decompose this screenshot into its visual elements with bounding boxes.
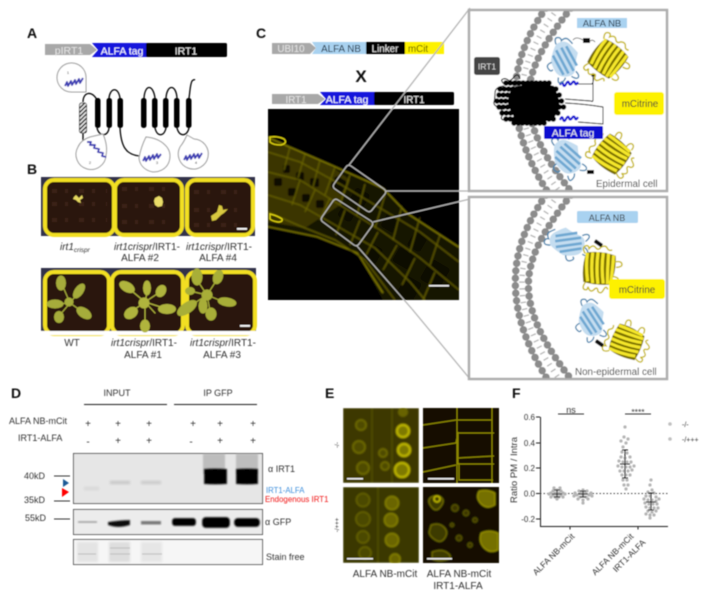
x category labels: ALFA NB-mCit (531, 531, 577, 577)
captions: irt1crispr/IRT1- (186, 242, 252, 253)
row label -/+++: -/+++ (335, 517, 341, 532)
panel: D western blots (9, 385, 328, 564)
blot annotations: Endogenous IRT1 (265, 495, 328, 504)
sample table (9, 416, 256, 448)
sample table: + (250, 436, 256, 447)
blot annotations: α IRT1 (268, 464, 295, 474)
image: NB-mCit IRT1-ALFA, -/- (423, 408, 499, 483)
photo row: bottom (41, 268, 257, 335)
image: NB-mCit, -/+++ (343, 487, 419, 564)
zoom bubble 2 (76, 134, 107, 169)
captions (60, 242, 256, 361)
rosette 3 (175, 269, 237, 320)
x category labels: IRT1-ALFA (611, 537, 648, 574)
legend (668, 422, 699, 444)
sample table: + (217, 436, 223, 447)
ALFA nanobody and mCitrine, upper (541, 217, 624, 295)
construct bar IRT1 ALFA tag IRT1 (272, 92, 454, 106)
construct bar UBI10 ALFA NB Linker mCit: UBI10 (277, 44, 305, 55)
molecular weight markers: 35kD (24, 495, 46, 505)
panel: epidermal cell structural model (469, 8, 667, 194)
construct bar IRT1 ALFA tag IRT1: IRT1 (403, 95, 425, 106)
legend: -/+++ (682, 437, 699, 444)
construct bar UBI10 ALFA NB Linker mCit: mCit (408, 44, 428, 55)
captions: crispr (74, 247, 91, 254)
panel label C: C (256, 25, 266, 41)
sample table: + (146, 419, 152, 430)
blot: alpha IRT1 (74, 454, 262, 504)
captions: ALFA #1 (124, 350, 162, 361)
panel: B plant photographs (27, 161, 257, 361)
root confocal micrograph (268, 109, 459, 303)
captions: ALFA #4 (199, 253, 237, 264)
y tick labels: 0.6 (524, 413, 536, 422)
captions: irt1crispr/IRT1- (111, 338, 177, 349)
callout zoom lines and boxes (321, 8, 470, 379)
panel: E confocal images (325, 385, 499, 592)
sample table: ALFA NB-mCit (9, 416, 68, 426)
zoom bubble 1 (57, 63, 86, 92)
panel: C constructs and root micrograph (256, 8, 470, 379)
IRT1 membrane topology diagram (57, 63, 208, 172)
captions: ALFA #3 (203, 350, 241, 361)
label mCitrine: mCitrine (622, 99, 659, 110)
significance: ****: **** (631, 407, 645, 417)
label IRT1 (474, 57, 500, 75)
column captions (353, 569, 491, 592)
IRT1 structure (494, 73, 603, 124)
photo row: top (41, 177, 255, 236)
column captions: IRT1-ALFA (433, 581, 483, 592)
panel label A: A (27, 25, 37, 41)
sample table: + (146, 436, 152, 447)
construct bar pIRT1 ALFA tag IRT1: IRT1 (175, 46, 197, 58)
legend: -/- (682, 422, 689, 429)
blot: alpha GFP (74, 510, 262, 534)
sample table: + (115, 436, 121, 447)
captions: irt1 (60, 242, 74, 253)
column captions: ALFA NB-mCit (427, 569, 491, 580)
label ALFA NB: ALFA NB (589, 213, 625, 223)
y tick labels: 0.2 (524, 464, 536, 473)
panel label D: D (11, 385, 21, 401)
sample table: + (115, 419, 121, 430)
panel: non-epidermal cell structural model (469, 195, 667, 382)
zoom bubble 2: 2 (89, 160, 92, 165)
significance: **** (625, 407, 651, 417)
sample table: IRT1-ALFA (18, 433, 62, 443)
construct bar UBI10 ALFA NB Linker mCit (272, 42, 444, 55)
captions: irt1crispr/IRT1- (114, 242, 180, 253)
zoom bubble 4 (178, 135, 208, 169)
x category labels: ALFA NB-mCit (590, 531, 636, 577)
ALFA nanobody and mCitrine, lower (575, 298, 656, 368)
ALFA nanobody and mCitrine, upper (545, 30, 639, 92)
label ALFA tag: ALFA tag (552, 128, 594, 140)
significance: ns (558, 405, 584, 415)
label ALFA NB: ALFA NB (583, 18, 621, 30)
label mCitrine: mCitrine (619, 285, 656, 296)
label mCitrine (609, 279, 665, 299)
ALFA nanobody and mCitrine, lower (548, 123, 645, 184)
sample table: + (250, 419, 256, 430)
construct bar pIRT1 ALFA tag IRT1: ALFA tag (101, 46, 143, 58)
molecular weight markers (24, 471, 70, 523)
construct bar pIRT1 ALFA tag IRT1 (45, 43, 227, 58)
sample table: - (86, 437, 90, 448)
label ALFA tag (544, 126, 603, 140)
zoom bubble 3 (139, 137, 170, 172)
blot annotations (265, 464, 328, 562)
membrane bilayer (515, 8, 573, 194)
group headers (84, 388, 257, 405)
blot annotations: α GFP (265, 517, 291, 527)
captions: ALFA #2 (121, 253, 159, 264)
panel label E: E (325, 385, 334, 401)
rosette 1 (118, 279, 176, 332)
panel label F: F (512, 385, 521, 401)
mean and SD error bars (552, 450, 656, 510)
construct bar IRT1 ALFA tag IRT1: ALFA tag (326, 94, 368, 106)
blot annotations: IRT1-ALFA (266, 486, 305, 495)
arrowhead: IRT1-ALFA (63, 479, 69, 487)
panel: F scatter plot (509, 385, 699, 577)
captions: WT (64, 338, 80, 349)
zoom bubble 4: 4 (195, 160, 198, 165)
caption Epidermal cell: Epidermal cell (596, 179, 658, 190)
molecular weight markers: 55kD (25, 513, 47, 523)
construct bar UBI10 ALFA NB Linker mCit: Linker (372, 44, 399, 55)
membrane bilayer (515, 195, 573, 382)
x category labels (531, 531, 648, 577)
sample table: + (190, 419, 196, 430)
WT rosette (47, 276, 93, 322)
row label -/-: -/- (335, 442, 341, 448)
label IRT1: IRT1 (478, 62, 496, 72)
sample table: + (217, 419, 223, 430)
scatter points (549, 427, 659, 518)
construct bar pIRT1 ALFA tag IRT1: pIRT1 (55, 45, 83, 57)
panel label B: B (27, 161, 37, 177)
group headers: IP GFP (203, 388, 233, 398)
molecular weight markers: 40kD (24, 471, 46, 481)
construct bar UBI10 ALFA NB Linker mCit: ALFA NB (321, 44, 361, 55)
group headers: INPUT (104, 388, 131, 398)
zoom bubble 3: 3 (156, 160, 159, 165)
panel: A construct and topology (27, 25, 227, 172)
cross symbol X: X (355, 67, 367, 86)
y axis title: Ratio PM / Intra (509, 436, 520, 503)
y tick labels: -0.2 (521, 515, 536, 524)
image: NB-mCit IRT1-ALFA, -/+++ (423, 487, 499, 563)
sample table: - (189, 437, 193, 448)
image: NB-mCit, -/- (343, 407, 419, 483)
column captions: ALFA NB-mCit (353, 569, 417, 580)
sample table: + (85, 419, 91, 430)
label mCitrine (614, 92, 664, 115)
caption Non-epidermal cell: Non-epidermal cell (575, 367, 657, 378)
construct bar IRT1 ALFA tag IRT1: IRT1 (285, 95, 307, 106)
zoom bubble 1: 1 (67, 70, 70, 75)
y tick labels: 0.4 (524, 439, 536, 448)
significance: ns: ns (566, 405, 576, 415)
y tick labels (521, 413, 536, 524)
captions: irt1crispr/IRT1- (190, 338, 256, 349)
blot: stain free (74, 540, 262, 564)
arrowhead: endogenous IRT1 (62, 488, 69, 497)
axes and ticks (536, 417, 668, 530)
y tick labels: 0.0 (524, 490, 536, 498)
blot annotations: Stain free (266, 552, 305, 562)
label ALFA NB (577, 211, 638, 223)
